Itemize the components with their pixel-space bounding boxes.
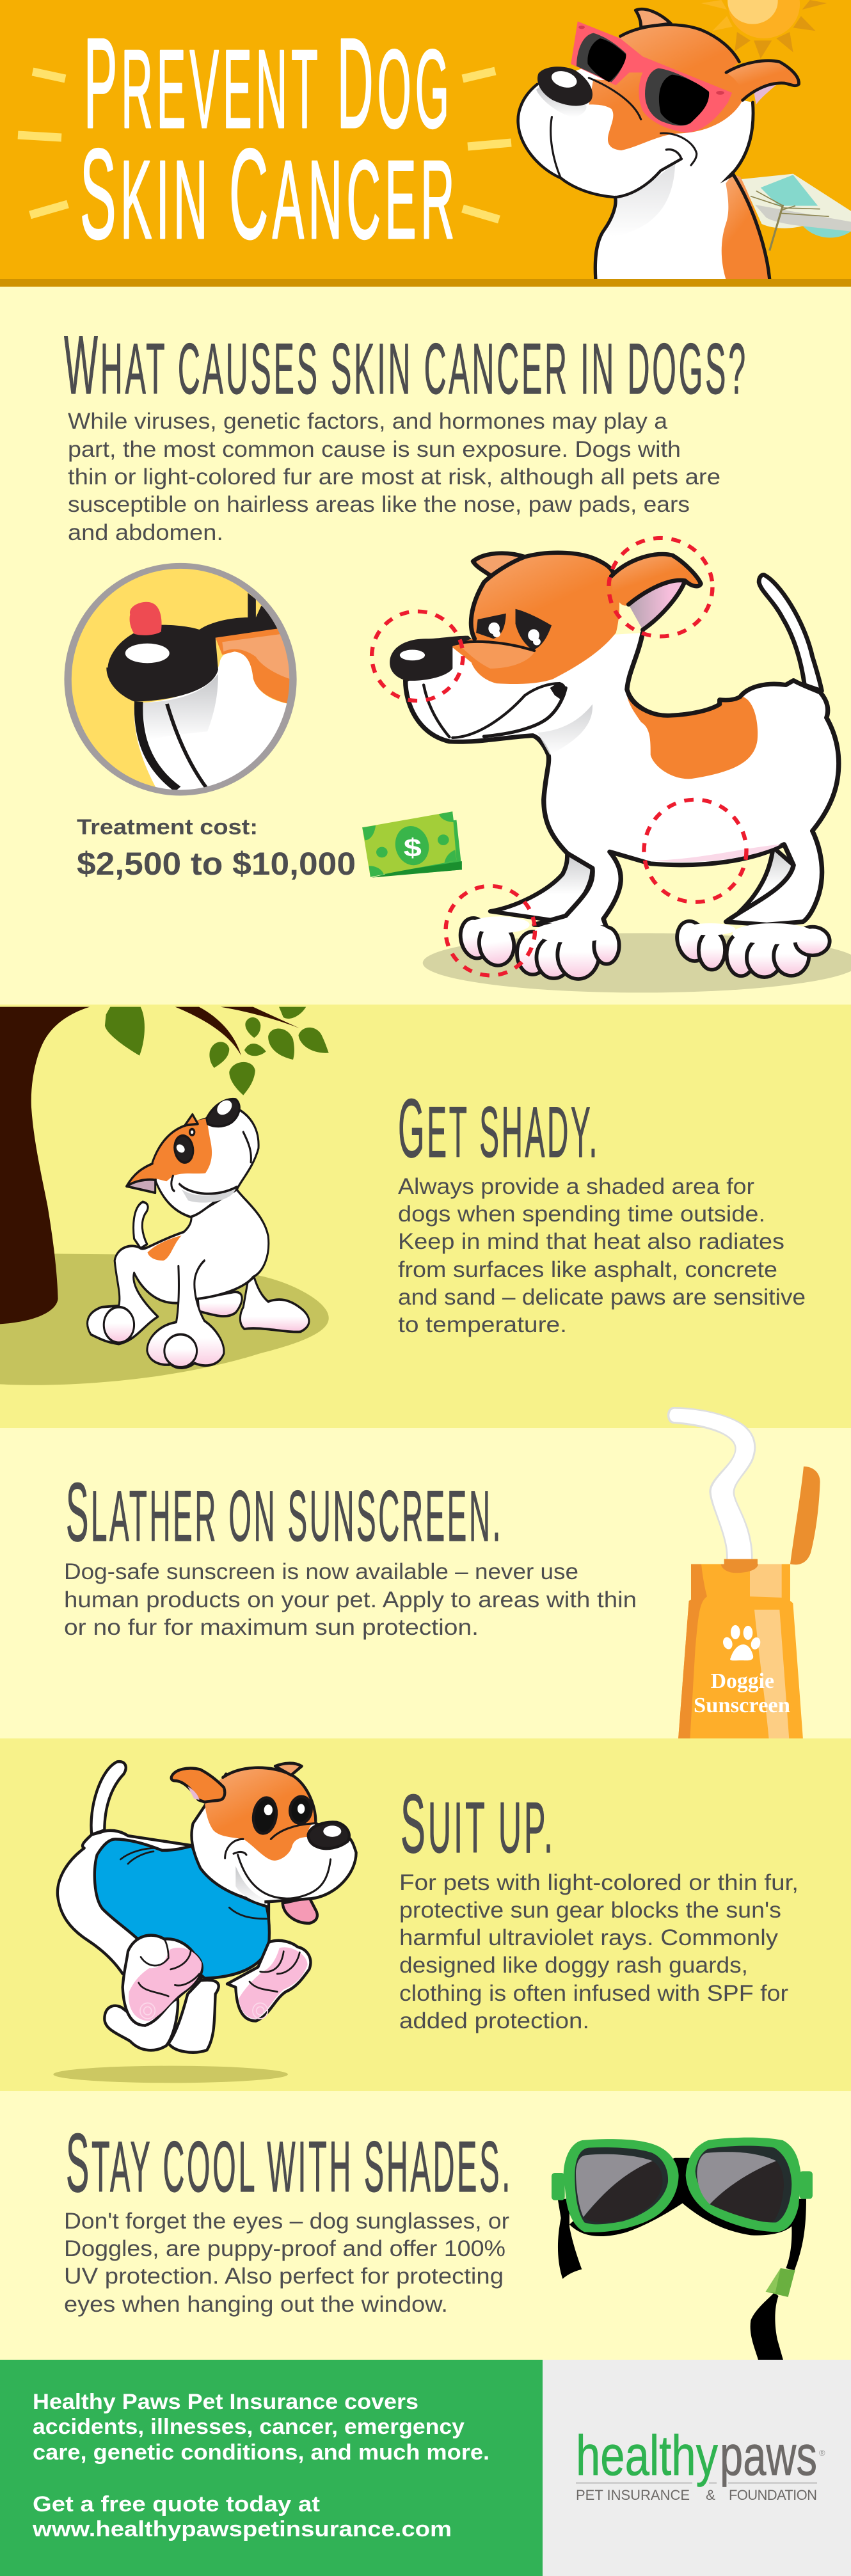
- title: [80, 12, 459, 266]
- text block: shades: Doggles, are puppy-proof and offer 100%: [64, 2236, 505, 2261]
- strap clip: [766, 2268, 795, 2297]
- icon: ear: [726, 61, 799, 104]
- text block: suit up: harmful ultraviolet rays. Commonly: [399, 1925, 779, 1950]
- text block: get shady: from surfaces like asphalt, concrete: [398, 1257, 777, 1282]
- icon: beach umbrella: [742, 174, 851, 251]
- panel: header: [0, 0, 851, 287]
- tongue: [283, 1898, 317, 1923]
- icon: sad eyes: [476, 609, 552, 650]
- text block: causes: thin or light-colored fur are most at risk, although all pets are: [68, 465, 720, 489]
- title: SKIN CANCER: [80, 123, 459, 266]
- tube neck: [721, 1559, 758, 1573]
- right foot: [227, 1941, 310, 2021]
- tube label: [694, 1669, 790, 1717]
- illustration: dog in sunglasses with sun and umbrella: [518, 0, 851, 279]
- text block: coverage and quote: Get a free quote today at: [33, 2492, 320, 2516]
- text block: get shady: dogs when spending time outside.: [398, 1202, 765, 1227]
- text block: shades: Don't forget the eyes – dog sunglasses, or: [64, 2209, 509, 2234]
- muzzle and smile lines: [551, 78, 697, 178]
- icon: leaves: [105, 1007, 329, 1095]
- text block: causes: part, the most common cause is sun exposure. Dogs with: [68, 437, 681, 462]
- head: [191, 1774, 356, 1902]
- ear: [171, 1769, 225, 1802]
- magnifier ring: [68, 566, 293, 793]
- body and hind leg: [88, 1189, 269, 1344]
- icon: sunscreen squeeze: [667, 1407, 756, 1559]
- red dashed circles: at-risk areas: [372, 538, 747, 975]
- icon: dollar bill: $: [404, 833, 422, 862]
- tail: [91, 1761, 126, 1834]
- neck shadow: [537, 704, 593, 755]
- head orange mask: [589, 25, 743, 150]
- panel: footer call to action: [0, 2360, 543, 2576]
- logo: healthy paws: PET INSURANCE: [576, 2487, 690, 2503]
- text block: get shady: and sand – delicate paws are sensitive: [398, 1285, 806, 1310]
- far legs: [490, 847, 793, 922]
- text block: sunscreen: [64, 1559, 637, 1640]
- belly tint: [651, 845, 781, 862]
- icon: tail: [759, 575, 822, 691]
- tail: [134, 1202, 148, 1248]
- icon: sun: [701, 0, 827, 59]
- illustration: magnified nose with growth: [68, 566, 294, 798]
- head: [155, 1108, 258, 1217]
- illustration: tree and dog in the shade: [0, 1007, 329, 1385]
- icon: pink sunglasses: [571, 21, 732, 132]
- text block: coverage and quote: [32, 2390, 489, 2541]
- logo: healthy paws: healthy: [576, 2424, 718, 2487]
- text block: suit up: protective sun gear blocks the sun's: [399, 1898, 781, 1923]
- text block: causes: and abdomen.: [68, 520, 223, 545]
- icon: dollar bill: [362, 811, 462, 878]
- text block: get shady: [398, 1174, 806, 1337]
- text block: sunscreen: Dog-safe sunscreen is now available – never use: [64, 1559, 578, 1584]
- smile lines: [271, 1824, 314, 1839]
- nose: [207, 1099, 239, 1126]
- text block: get shady: Keep in mind that heat also radiates: [398, 1229, 784, 1254]
- icon: nose: [390, 636, 472, 681]
- panel: footer logo: [543, 2360, 851, 2576]
- logo: healthy paws: ®: [819, 2448, 825, 2458]
- text block: sunscreen: or no fur for maximum sun protection.: [64, 1615, 479, 1640]
- small ear: [275, 1763, 302, 1775]
- orange back spot: [627, 696, 758, 779]
- icon: ear: [611, 554, 701, 630]
- rear legs: [104, 1987, 178, 2050]
- panel: suit up: SUIT UP.: [401, 1777, 555, 1870]
- illustration: running dog in blue shirt: [53, 1761, 356, 2083]
- text block: get shady: Always provide a shaded area for: [398, 1174, 754, 1199]
- text block: treatment cost: Treatment cost:: [77, 815, 258, 839]
- icon: nose highlight: [125, 644, 170, 663]
- text block: suit up: clothing is often infused with SPF for: [399, 1981, 788, 2006]
- ground shade: [0, 1254, 329, 1385]
- mouth lines: [424, 682, 566, 738]
- text block: coverage and quote: Healthy Paws Pet Insurance covers: [33, 2390, 418, 2414]
- text block: coverage and quote: www.healthypawspetinsurance.com: [32, 2517, 452, 2541]
- green frame tabs: [552, 2171, 813, 2200]
- logo: healthy paws: &: [706, 2487, 715, 2503]
- head orange: [451, 553, 619, 684]
- middle paw: [198, 1292, 242, 1316]
- text block: shades: eyes when hanging out the window.: [64, 2292, 448, 2317]
- text block: causes: [68, 409, 720, 545]
- ground shadow: [423, 933, 851, 992]
- text block: sunscreen: human products on your pet. Apply to areas with thin: [64, 1587, 637, 1612]
- ear: [127, 1180, 155, 1193]
- text block: causes: susceptible on hairless areas like the nose, paw pads, ears: [68, 492, 690, 517]
- blue shirt: [95, 1839, 269, 1978]
- text block: coverage and quote: care, genetic conditions, and much more.: [33, 2440, 489, 2465]
- right lens: [686, 2138, 801, 2232]
- text block: shades: UV protection. Also perfect for protecting: [64, 2264, 504, 2289]
- icon: paws: [457, 916, 830, 979]
- hind paw pad: [104, 1307, 134, 1342]
- body: [406, 633, 839, 928]
- back spot: [148, 1236, 182, 1260]
- icon: red growth: [130, 602, 162, 635]
- text block: suit up: added protection.: [399, 2008, 589, 2033]
- nose: [308, 1822, 349, 1849]
- orange mask: [127, 1118, 212, 1186]
- far hind paw: [240, 1277, 309, 1332]
- ground shadow: [53, 2066, 288, 2083]
- illustration: sunscreen tube: [667, 1407, 820, 1739]
- illustration: sad dog with at-risk areas: [372, 538, 851, 992]
- panel: what causes skin cancer: [64, 336, 851, 993]
- text block: treatment cost: $2,500 to $10,000: [77, 846, 356, 882]
- body: [58, 1831, 269, 1978]
- panel: suit up: [0, 1738, 851, 2091]
- panel: slather on sunscreen: [0, 1407, 851, 1739]
- panel: get shady: GET SHADY.: [398, 1081, 600, 1175]
- left foot: [123, 1936, 202, 2026]
- tree trunk: [0, 1007, 90, 1324]
- snout: [452, 642, 534, 669]
- text block: shades: [64, 2209, 509, 2317]
- tube label: Doggie: [711, 1669, 774, 1693]
- left lens: [564, 2139, 679, 2232]
- eyes: [171, 1133, 196, 1166]
- dog body: [518, 43, 770, 279]
- title: PREVENT DOG: [84, 12, 453, 155]
- illustration: dog goggles: [552, 2138, 813, 2360]
- eyes: [251, 1796, 279, 1835]
- open cap: [790, 1467, 820, 1564]
- text block: suit up: For pets with light-colored or thin fur,: [399, 1870, 799, 1895]
- panel: stay cool with shades: [0, 2091, 851, 2360]
- icon: paw: [722, 1625, 762, 1660]
- logo: healthy paws: FOUNDATION: [729, 2487, 817, 2503]
- text block: suit up: designed like doggy rash guards,: [399, 1953, 748, 1978]
- text block: treatment cost: [77, 815, 356, 882]
- icon: nose: [536, 67, 593, 117]
- orange head: [205, 1768, 316, 1861]
- tube body: [678, 1564, 803, 1739]
- logo: healthy paws: [576, 2424, 825, 2503]
- front leg and paw: [147, 1260, 224, 1368]
- text block: coverage and quote: accidents, illnesses, cancer, emergency: [33, 2415, 465, 2439]
- text block: get shady: to temperature.: [398, 1312, 567, 1337]
- title sunburst dashes: [18, 71, 511, 219]
- icon: back ear: [473, 553, 525, 578]
- text block: causes: While viruses, genetic factors, and hormones may play a: [68, 409, 668, 434]
- logo: healthy paws: paws: [720, 2424, 817, 2487]
- tube label: Sunscreen: [694, 1693, 790, 1717]
- branches: [175, 1007, 299, 1056]
- text block: suit up: [399, 1870, 799, 2033]
- dog looking up: [88, 1099, 309, 1368]
- straps: [558, 2158, 806, 2360]
- panel: get shady: [0, 1005, 851, 1428]
- icon: back ear: [635, 9, 671, 28]
